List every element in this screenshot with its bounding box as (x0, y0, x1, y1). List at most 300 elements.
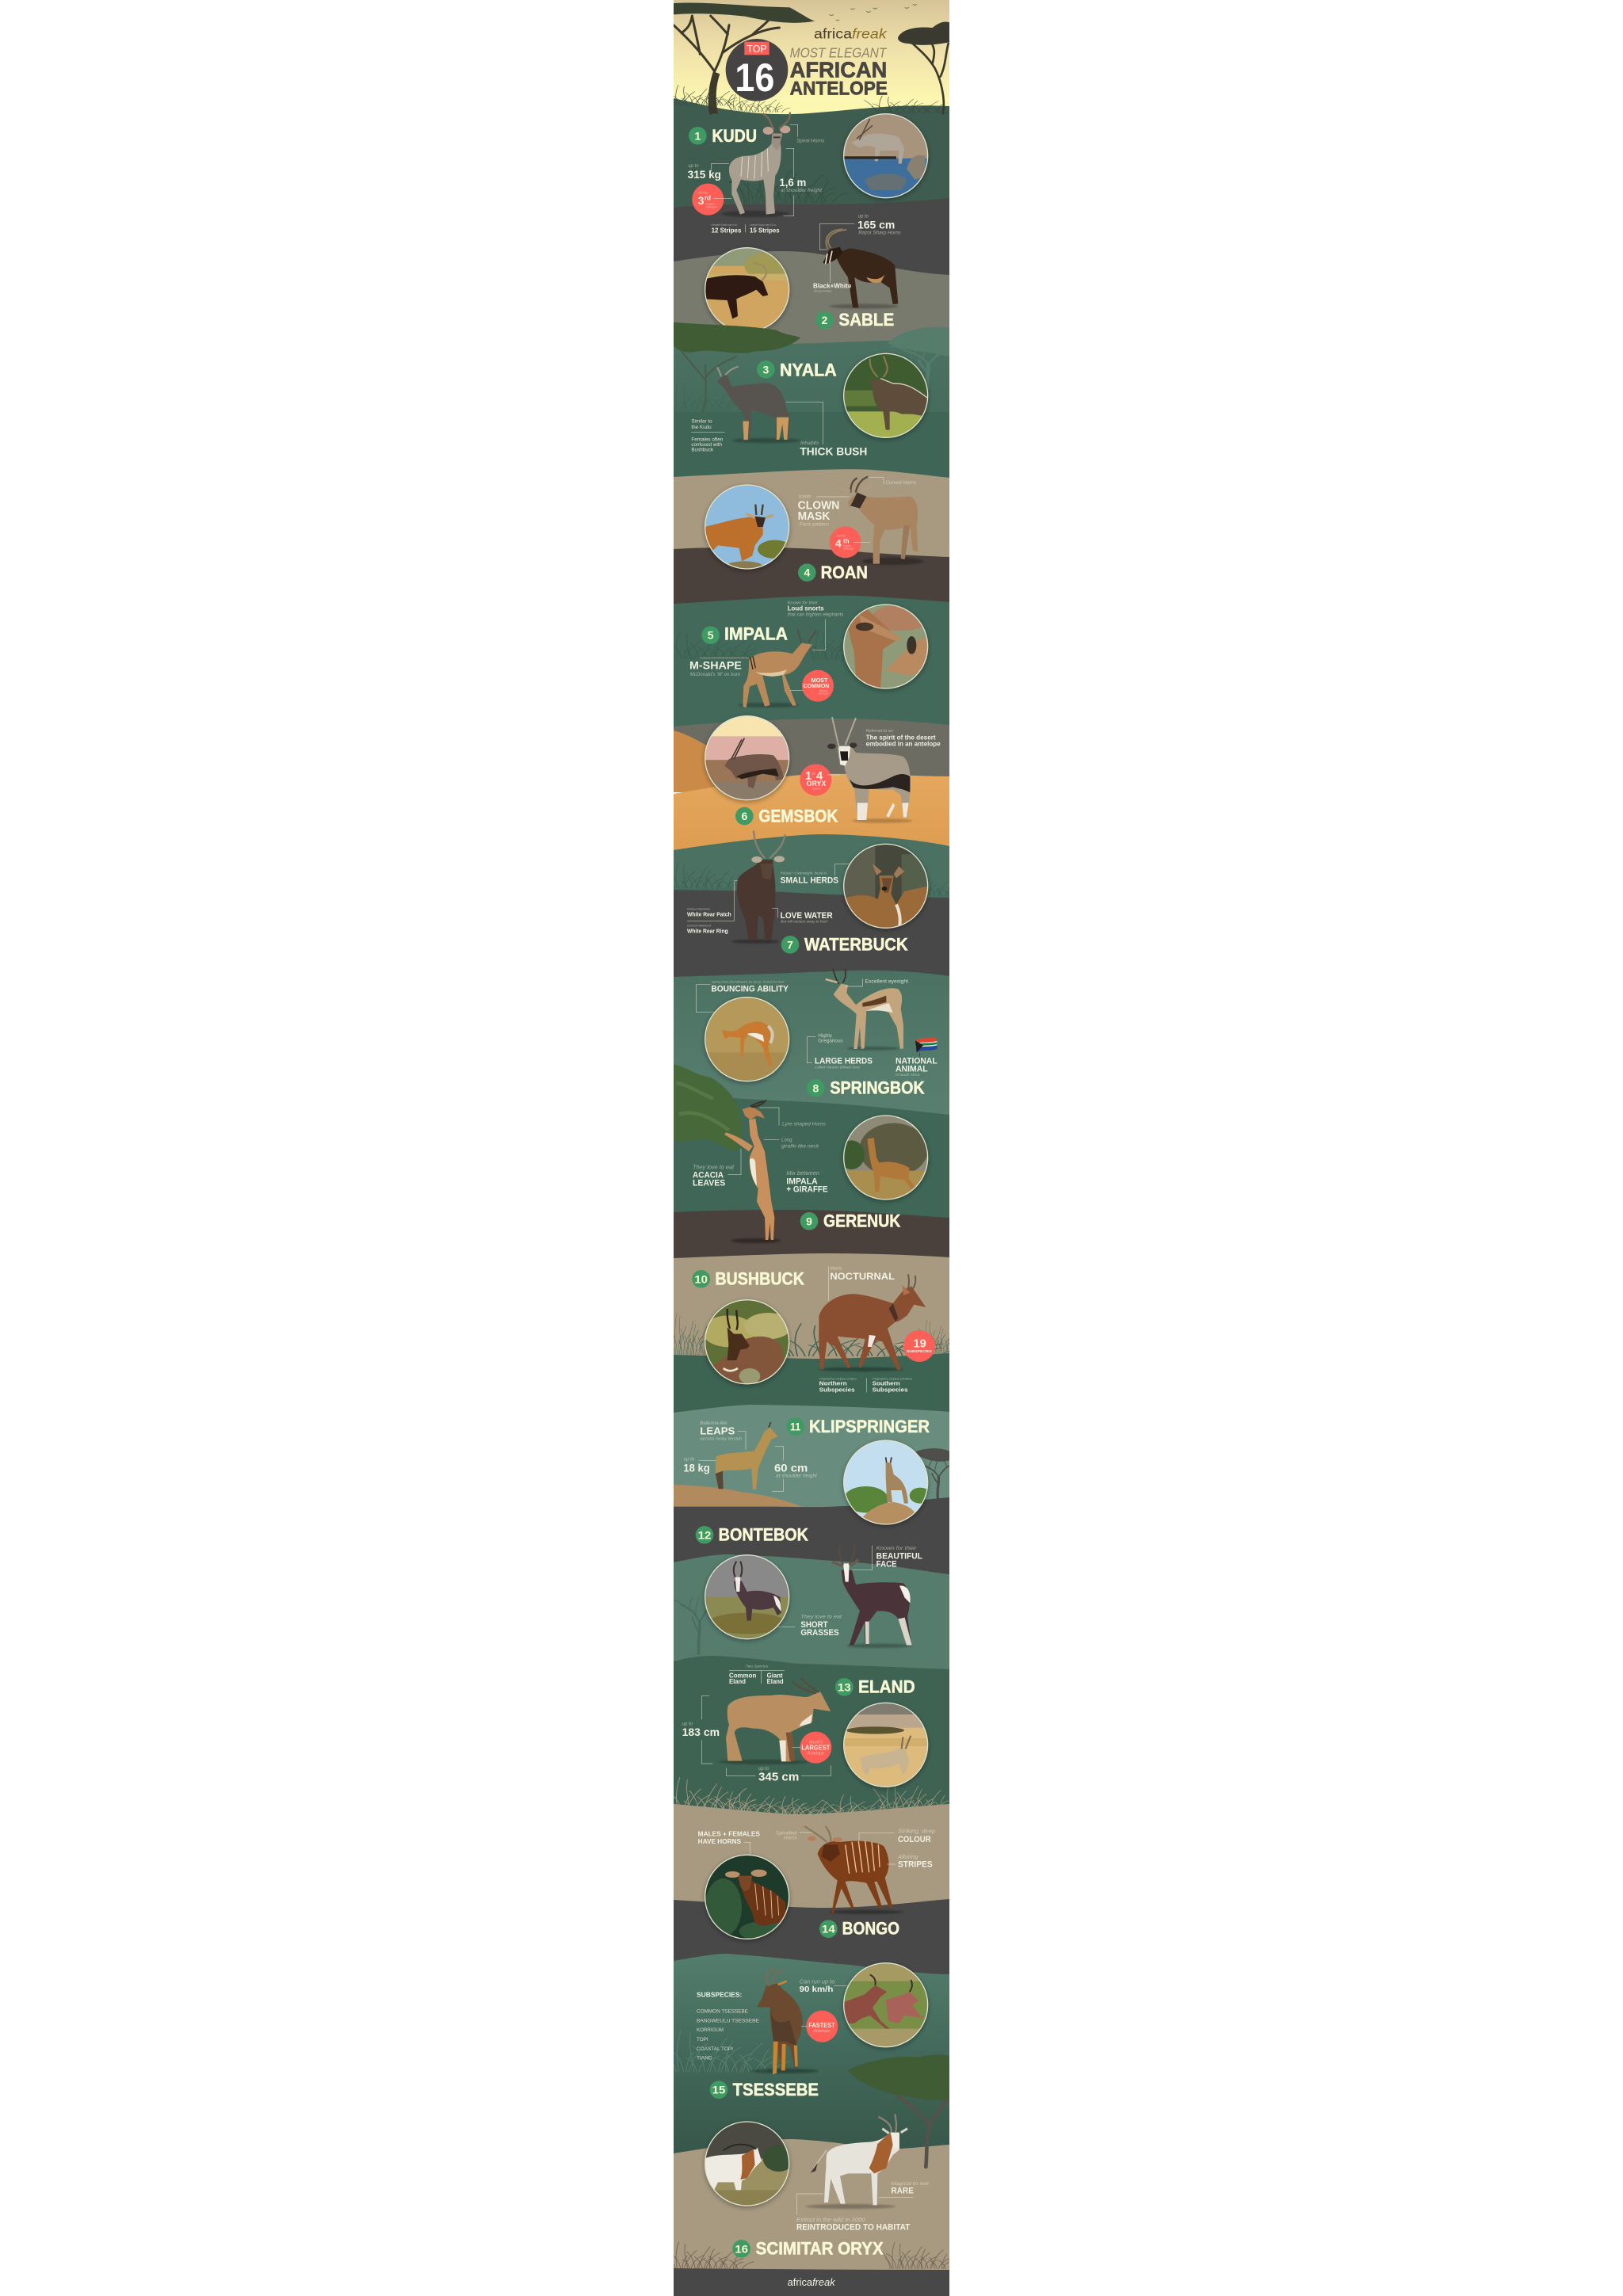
photo: klipspringer (843, 1440, 930, 1527)
panel: scimitar oryx (661, 2114, 960, 2288)
callout: clown mask: MASK (798, 510, 831, 523)
roan heading (798, 563, 868, 582)
subspecies list: TIANG (697, 2056, 712, 2061)
illustration: bontebok (832, 1545, 913, 1648)
callout: bouncing ability: 'Spring' from the Afrikaans for 'jump'. Known for their (711, 980, 785, 984)
callout: sharp horns: up to (858, 215, 869, 219)
callout: m-shape: M-SHAPE (689, 659, 742, 672)
photo: springbok (705, 997, 790, 1084)
roan heading: 4 (804, 566, 810, 579)
callout: third largest: rd (705, 195, 711, 202)
callout: thick bush: THICK BUSH (800, 445, 867, 458)
callout: large herds: Called Harems (Mixed Sex) (815, 1066, 860, 1070)
panel: tsessebe (655, 1962, 949, 2167)
tree: acacia right (848, 2054, 949, 2167)
callout: world's largest: World's (809, 1740, 823, 1745)
callout: spiralled horns: Horns (784, 1836, 797, 1841)
background: sable taupe ground (674, 251, 949, 344)
callout: two species: Common (729, 1672, 756, 1679)
callout: national animal: NATIONAL (896, 1056, 938, 1066)
callout: rare: RARE (891, 2187, 914, 2196)
photo: gerenuk (838, 1116, 929, 1202)
callout: short grasses: They love to eat (800, 1614, 842, 1619)
illustration: gemsbok (827, 717, 913, 823)
illustration: springbok (826, 969, 903, 1051)
callout: stripes: Alluring (897, 1855, 918, 1860)
callout: height (772, 1446, 817, 1492)
callout: spiral horns: Spiral Horns (796, 138, 825, 143)
callout: weight: 18 kg (683, 1462, 710, 1474)
title (789, 48, 888, 95)
sable heading: SABLE (838, 310, 894, 330)
subspecies list: KORRIGUM (697, 2027, 724, 2033)
callout: weight (688, 164, 729, 181)
callout: southern subspecies: Southern (873, 1380, 900, 1387)
callout: m-shape: McDonald's 'M' on bum (690, 673, 740, 677)
scimitar oryx heading: SCIMITAR ORYX (756, 2239, 884, 2259)
gerenuk heading: GERENUK (823, 1211, 900, 1231)
eland heading: ELAND (858, 1677, 915, 1697)
callout: curved horns: Curved Horns (885, 480, 917, 486)
illustration: bongo (804, 1826, 903, 1914)
callout: excellent eyesight (846, 979, 908, 986)
logo: africafreak (814, 25, 888, 41)
panel: bongo (698, 1826, 935, 1942)
callout: one of four oryx: 1 (805, 770, 812, 783)
callout: impala plus giraffe: + GIRAFFE (786, 1185, 828, 1195)
callout: subspecies count (893, 1330, 935, 1362)
callout: stripes: 12 Stripes (712, 226, 742, 234)
note: similar to kudu (691, 418, 725, 453)
background: sand dune (674, 730, 727, 792)
callout: curved horns (869, 478, 917, 486)
callout: southern subspecies: Subspecies (873, 1386, 908, 1394)
photo: kudu at waterhole (843, 113, 929, 200)
panel: bontebok (672, 1525, 922, 1653)
illustration: impala (739, 630, 816, 707)
note: similar to kudu: Similar to (691, 418, 712, 424)
callout: reintroduced to habitat: REINTRODUCED TO HABITAT (796, 2223, 911, 2233)
subspecies list (697, 1990, 760, 2061)
callout: world's largest (792, 1732, 831, 1764)
tree: faded right (888, 327, 961, 388)
footer logo: africafreak (788, 2276, 836, 2288)
callout: acacia leaves (693, 1149, 741, 1188)
callout: beautiful face: Known for their (876, 1546, 917, 1551)
waterbuck heading: 7 (787, 938, 793, 951)
eland heading: 13 (838, 1680, 851, 1693)
icon: south african flag (915, 1037, 938, 1056)
illustration: klipspringer (716, 1422, 778, 1489)
callout: nocturnal (828, 1266, 895, 1301)
callout: world's largest: Antelope (807, 1751, 824, 1756)
callout: stripes: 15 Stripes (750, 226, 780, 234)
note: similar to kudu: Bushbuck (691, 448, 714, 453)
grass: tsessebe (655, 2031, 790, 2072)
kudu heading (689, 126, 757, 146)
grass: impala (659, 631, 887, 660)
callout: impala plus giraffe: IMPALA (786, 1177, 818, 1186)
callout: southern subspecies: Tragelaphus scriptus sylvaticus (873, 1377, 912, 1380)
callout: top speed: Can run up to (800, 1978, 834, 1985)
subspecies list: COASTAL TOPI (697, 2046, 733, 2052)
callout: height: 183 cm (682, 1726, 720, 1738)
gerenuk heading: 9 (806, 1215, 812, 1227)
illustration: kudu (721, 113, 790, 217)
callout: stripes: Greater Kudu has 6 to (711, 223, 737, 227)
photo: nyala (843, 353, 929, 440)
background: nyala green (674, 341, 949, 412)
callout: small herds: SMALL HERDS (781, 875, 838, 885)
nyala heading: 3 (762, 363, 769, 376)
background: scimitar tan (674, 2139, 949, 2274)
background: bongo tan (674, 1804, 949, 1909)
background: klipspringer green (674, 1405, 949, 1513)
panel: kudu (688, 113, 929, 234)
callout: loud snorts (788, 601, 843, 650)
callout: one of four oryx: of (812, 772, 815, 776)
callout: lyre-shaped horns (759, 1108, 826, 1127)
callout: clown mask: CLOWN (798, 499, 839, 512)
subspecies list: BANGWEULU TSESSEBE (697, 2018, 760, 2023)
callout: large herds (807, 1033, 873, 1070)
callout: third largest: largest (706, 202, 716, 205)
background: gemsbok grey (674, 719, 949, 776)
illustration: tsessebe (750, 1969, 819, 2074)
callout: large herds: LARGE HERDS (815, 1057, 873, 1066)
callout: loud snorts: Loud snorts (788, 605, 824, 612)
callout: weight (683, 1458, 716, 1474)
tree: nyala acacia (674, 322, 800, 412)
bushbuck heading: BUSHBUCK (715, 1269, 804, 1289)
callout: love water: But will venture away to feed (781, 920, 827, 924)
callout: long neck (764, 1138, 819, 1149)
springbok heading: SPRINGBOK (830, 1078, 925, 1098)
callout: spiral horns (790, 124, 825, 143)
tree: gerenuk foliage (674, 1064, 742, 1150)
callout: small herds (781, 864, 865, 885)
background: footer (674, 2268, 949, 2296)
callout: beautiful face (850, 1546, 922, 1570)
callout: leaps (700, 1421, 746, 1450)
callout: shoulder height: at shoulder height (781, 188, 822, 193)
callout: beautiful face: FACE (876, 1560, 897, 1569)
callout: one of four oryx (800, 764, 840, 795)
background: eland darker green (674, 1656, 949, 1822)
callout: length: up to (758, 1767, 769, 1772)
callout: small herds: Robust + Overweight, found in (781, 871, 827, 875)
callout: excellent eyesight: Excellent eyesight (865, 979, 908, 985)
callout: third largest: 3 (698, 194, 705, 207)
photo: bongo (705, 1855, 797, 1942)
background: waterbuck dark ground (674, 890, 949, 982)
callout: nocturnal: Mainly (830, 1267, 842, 1272)
callout: national animal: ANIMAL (896, 1064, 928, 1074)
callout: short grasses: GRASSES (800, 1628, 839, 1638)
page artwork (674, 0, 949, 2296)
callout: impala plus giraffe: Mix between (786, 1169, 819, 1177)
callout: stripes (887, 1855, 933, 1870)
photo: scimitar oryx (705, 2122, 795, 2208)
callout: third largest (692, 184, 731, 215)
illustration: roan (838, 477, 923, 565)
subspecies list: SUBSPECIES: (697, 1990, 742, 1998)
background: bontebok dark ground (674, 1497, 949, 1577)
bontebok heading: BONTEBOK (719, 1525, 808, 1545)
illustration: eland (719, 1678, 831, 1764)
callout: impala plus giraffe (786, 1169, 828, 1195)
callout: black and white: Black+White (813, 283, 852, 290)
waterbuck heading: WATERBUCK (804, 934, 908, 954)
panel: springbok (697, 969, 938, 1098)
callout: stripes: STRIPES (898, 1860, 933, 1870)
callout: loud snorts: that can frighten elephants (788, 612, 843, 617)
note: similar to kudu: confused with (691, 442, 723, 448)
callout: acacia leaves: They love to eat (693, 1165, 735, 1170)
background: springbok green (674, 971, 949, 1125)
callout: spirit of the desert: embodied in an antelope (866, 740, 941, 747)
callout: black and white (813, 261, 852, 293)
background: bushbuck green ground (674, 1353, 949, 1418)
callout: northern subspecies (819, 1377, 857, 1394)
callout: stripes (711, 223, 780, 234)
callout: length (726, 1765, 831, 1783)
callout: large herds: Gregarious (818, 1039, 843, 1044)
background: roan brown ground (674, 547, 949, 604)
callout: bouncing ability (697, 980, 789, 1013)
callout: spirit of the desert (866, 729, 941, 747)
callout: clown mask: Face pattern (800, 521, 829, 527)
callout: third largest: antelope (706, 205, 717, 208)
grass: header tufts (662, 85, 957, 113)
callout: rear patch: Common Waterbuck (687, 925, 712, 928)
illustration: scimitar oryx (806, 2114, 907, 2209)
callout: deep colour (859, 1829, 935, 1844)
header section (662, 3, 957, 113)
background: gerenuk brown ground (674, 1210, 949, 1258)
panel: klipspringer (674, 1417, 961, 1527)
background: nyala lower ground (674, 420, 949, 478)
grass: scimitar (661, 2242, 960, 2268)
gerenuk heading (800, 1211, 900, 1231)
grass: bushbuck (666, 1314, 964, 1356)
callout: height: up to (682, 1722, 693, 1726)
kudu heading: 1 (694, 129, 701, 142)
callout: two species: Eland (767, 1678, 784, 1685)
tree: right acacia (898, 21, 949, 113)
nyala heading (757, 360, 837, 379)
panel: gemsbok (705, 715, 941, 826)
tree: faded bontebok (672, 1597, 724, 1653)
panel: nyala (662, 322, 961, 458)
callout: fastest antelope: Antelope (812, 2029, 831, 2034)
background: kudu green hill (674, 98, 949, 208)
callout: sharp horns: Razor Sharp Horns (858, 231, 901, 236)
callout: height (682, 1696, 720, 1764)
title: MOST ELEGANT (790, 45, 888, 61)
badge: top 16 (726, 39, 788, 101)
scimitar oryx heading: 16 (735, 2242, 748, 2255)
callout: stripes: Lesser Kudu has 11 to (750, 223, 776, 227)
bontebok heading: 12 (698, 1528, 712, 1541)
badge: top 16: TOP (747, 43, 767, 55)
sable heading (815, 310, 894, 330)
callout: loud snorts: Known for their (788, 601, 819, 606)
callout: rear patch: Defassa Waterbuck (687, 908, 710, 911)
callout: one of four oryx: ORYX (807, 780, 826, 788)
photo: roan (705, 485, 792, 572)
bongo heading: BONGO (842, 1919, 899, 1939)
callout: most common: antelope (819, 692, 829, 696)
callout: long neck: giraffe-like neck (781, 1144, 819, 1149)
panel: sable (705, 215, 901, 334)
background: bongo dark ground (674, 1899, 949, 1981)
callout: weight: up to (684, 1458, 695, 1463)
callout: lyre-shaped horns: Lyre-shaped Horns (782, 1122, 826, 1127)
callout: m-shape (689, 658, 749, 677)
callout: subspecies count: 19 (914, 1338, 926, 1351)
photo: impala (843, 605, 930, 691)
callout: rare (878, 2181, 930, 2197)
gemsbok heading: 6 (741, 810, 747, 822)
photo: tsessebe (843, 1962, 929, 2050)
illustration: nyala (717, 367, 800, 443)
callout: southern subspecies (867, 1377, 912, 1394)
birds (830, 4, 917, 21)
callout: spiralled horns: Spiralled (776, 1831, 797, 1836)
callout: long neck: Long, (781, 1138, 793, 1142)
callout: top speed: 90 km/h (800, 1985, 833, 1994)
impala heading: 5 (708, 629, 714, 642)
callout: love water: LOVE WATER (781, 911, 833, 921)
callout: shoulder height (779, 148, 822, 216)
sable heading: 2 (821, 314, 827, 326)
callout: height: at shoulder height (776, 1473, 817, 1478)
callout: deep colour: Striking, deep (898, 1829, 935, 1835)
callout: third largest: Mostly (698, 190, 708, 194)
callout: thick bush (786, 402, 867, 458)
callout: northern subspecies: Tragelaphus scriptus scriptus (819, 1377, 857, 1380)
illustration: bushbuck (819, 1274, 926, 1371)
illustration: gerenuk (724, 1100, 781, 1243)
background: bushbuck tan (674, 1253, 949, 1363)
callout: both sexes have horns (698, 1829, 760, 1863)
background: gerenuk darker green (674, 1093, 949, 1220)
callout: sharp horns (819, 215, 901, 250)
callout: fastest antelope: FASTEST (808, 2021, 835, 2029)
callout: fourth largest (830, 526, 870, 558)
note: similar to kudu: Females often (691, 437, 724, 442)
callout: fourth largest: th (843, 538, 850, 545)
callout: shoulder height: 1,6 m (779, 176, 806, 189)
callout: most common: African (819, 689, 827, 692)
callout: beautiful face: BEAUTIFUL (876, 1551, 922, 1561)
callout: black and white: Strong contrast (814, 290, 832, 293)
callout: national animal (896, 1056, 938, 1077)
callout: fourth largest: antelope (843, 547, 854, 551)
photo: gemsbok (705, 715, 790, 803)
bushbuck heading: 10 (694, 1272, 708, 1285)
callout: one of four oryx: species (812, 788, 822, 791)
callout: one of four oryx: 4 (816, 770, 823, 783)
callout: fourth largest: Almost (835, 533, 846, 537)
illustration: sable (823, 229, 898, 309)
callout: subspecies count: SUBSPECIES (907, 1349, 932, 1353)
callout: two species (729, 1664, 785, 1685)
impala heading: IMPALA (724, 624, 788, 644)
kudu heading: KUDU (712, 126, 757, 146)
callout: acacia leaves: LEAVES (693, 1179, 726, 1188)
background: tsessebe green (674, 1954, 949, 2163)
background: roan tan (674, 469, 949, 563)
callout: both sexes have horns: HAVE HORNS (698, 1837, 741, 1845)
callout: rear patch: White Rear Patch (687, 911, 731, 918)
callout: both sexes have horns: MALES + FEMALES (698, 1829, 760, 1837)
panel: gerenuk (674, 1064, 929, 1243)
callout: national animal: of South Africa (896, 1073, 920, 1077)
background: desert sand (674, 774, 949, 856)
klipspringer heading: 11 (790, 1421, 801, 1433)
background: bontebok green (674, 1554, 949, 1672)
illustration: waterbuck (731, 830, 785, 944)
background: impala green (674, 596, 949, 737)
tree: left acacia (674, 3, 816, 113)
callout: fourth largest: 4 (835, 537, 842, 550)
callout: weight: 315 kg (688, 168, 721, 181)
panel: roan (705, 477, 923, 582)
callout: short grasses: SHORT (800, 1620, 828, 1630)
callout: acacia leaves: ACACIA (693, 1171, 724, 1180)
subspecies list: TOPI (697, 2037, 708, 2042)
photo: waterbuck (843, 844, 929, 930)
photo: bontebok (705, 1554, 790, 1642)
callout: most common: COMMON (804, 682, 830, 689)
illustration: rock (674, 1485, 802, 1507)
subspecies list: COMMON TSESSEBE (697, 2008, 749, 2014)
grass: eland (659, 1778, 958, 1817)
klipspringer heading: KLIPSPRINGER (809, 1417, 930, 1436)
title: ANTELOPE (790, 78, 888, 99)
callout: love water (772, 909, 833, 924)
callout: reintroduced to habitat: Extinct in the wild in 2000 (796, 2216, 866, 2223)
background: waterbuck green (674, 834, 949, 903)
badge: top 16: 16 (735, 55, 774, 100)
tsessebe heading: 15 (712, 2084, 726, 2096)
photo: eland (843, 1703, 929, 1789)
callout: rear patch (687, 881, 738, 934)
callout: nocturnal: NOCTURNAL (830, 1271, 895, 1282)
photo: bushbuck (702, 1299, 792, 1386)
callout: northern subspecies: Subspecies (819, 1386, 855, 1394)
callout: spiralled horns (776, 1831, 814, 1841)
callout: thick bush: Inhabits (800, 441, 819, 446)
callout: top speed (800, 1978, 860, 1994)
callout: length: 345 cm (758, 1771, 799, 1783)
photo: sable (705, 247, 792, 334)
callout: fourth largest: largest (843, 544, 852, 547)
tree: faded klipspringer (913, 1448, 961, 1497)
grass: nyala (662, 383, 747, 412)
bongo heading (819, 1919, 899, 1939)
panel: bushbuck (666, 1266, 964, 1394)
callout: large herds: Highly (818, 1033, 833, 1039)
springbok heading: 8 (812, 1081, 819, 1094)
grass: waterbuck (662, 862, 962, 898)
callout: spirit of the desert: The spirit of the desert (866, 734, 936, 742)
gemsbok heading: GEMSBOK (758, 806, 838, 826)
panel: eland (659, 1664, 958, 1817)
callout: fastest antelope (801, 2011, 838, 2042)
